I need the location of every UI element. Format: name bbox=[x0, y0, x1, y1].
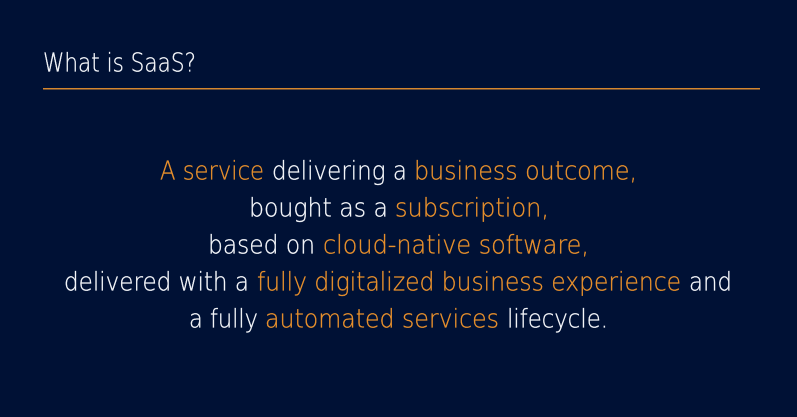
line 2: subscription bbox=[249, 194, 549, 224]
line 5: automated services lifecycle: automated services bbox=[265, 304, 499, 334]
definition text block bbox=[64, 156, 732, 334]
line 3: cloud-native software: based on bbox=[208, 230, 315, 260]
line 1: service and business outcome: delivering a bbox=[272, 156, 407, 186]
line 4: digitalized business experience: and bbox=[689, 268, 732, 298]
title underline bbox=[43, 88, 760, 90]
title: What is SaaS? bbox=[43, 48, 196, 78]
line 3: cloud-native software bbox=[208, 230, 589, 260]
line 1: service and business outcome bbox=[160, 156, 637, 186]
line 5: automated services lifecycle: a fully bbox=[189, 304, 258, 334]
line 5: automated services lifecycle: lifecycle. bbox=[507, 304, 608, 334]
line 1: service and business outcome: A service bbox=[160, 156, 264, 186]
line 3: cloud-native software: cloud-native software, bbox=[323, 230, 589, 260]
line 4: digitalized business experience: fully digitalized business experience bbox=[257, 268, 681, 298]
line 5: automated services lifecycle bbox=[189, 304, 608, 334]
line 2: subscription: bought as a bbox=[249, 194, 388, 224]
line 2: subscription: subscription, bbox=[395, 194, 549, 224]
line 1: service and business outcome: business outcome, bbox=[414, 156, 637, 186]
line 4: digitalized business experience: delivered with a bbox=[64, 268, 249, 298]
